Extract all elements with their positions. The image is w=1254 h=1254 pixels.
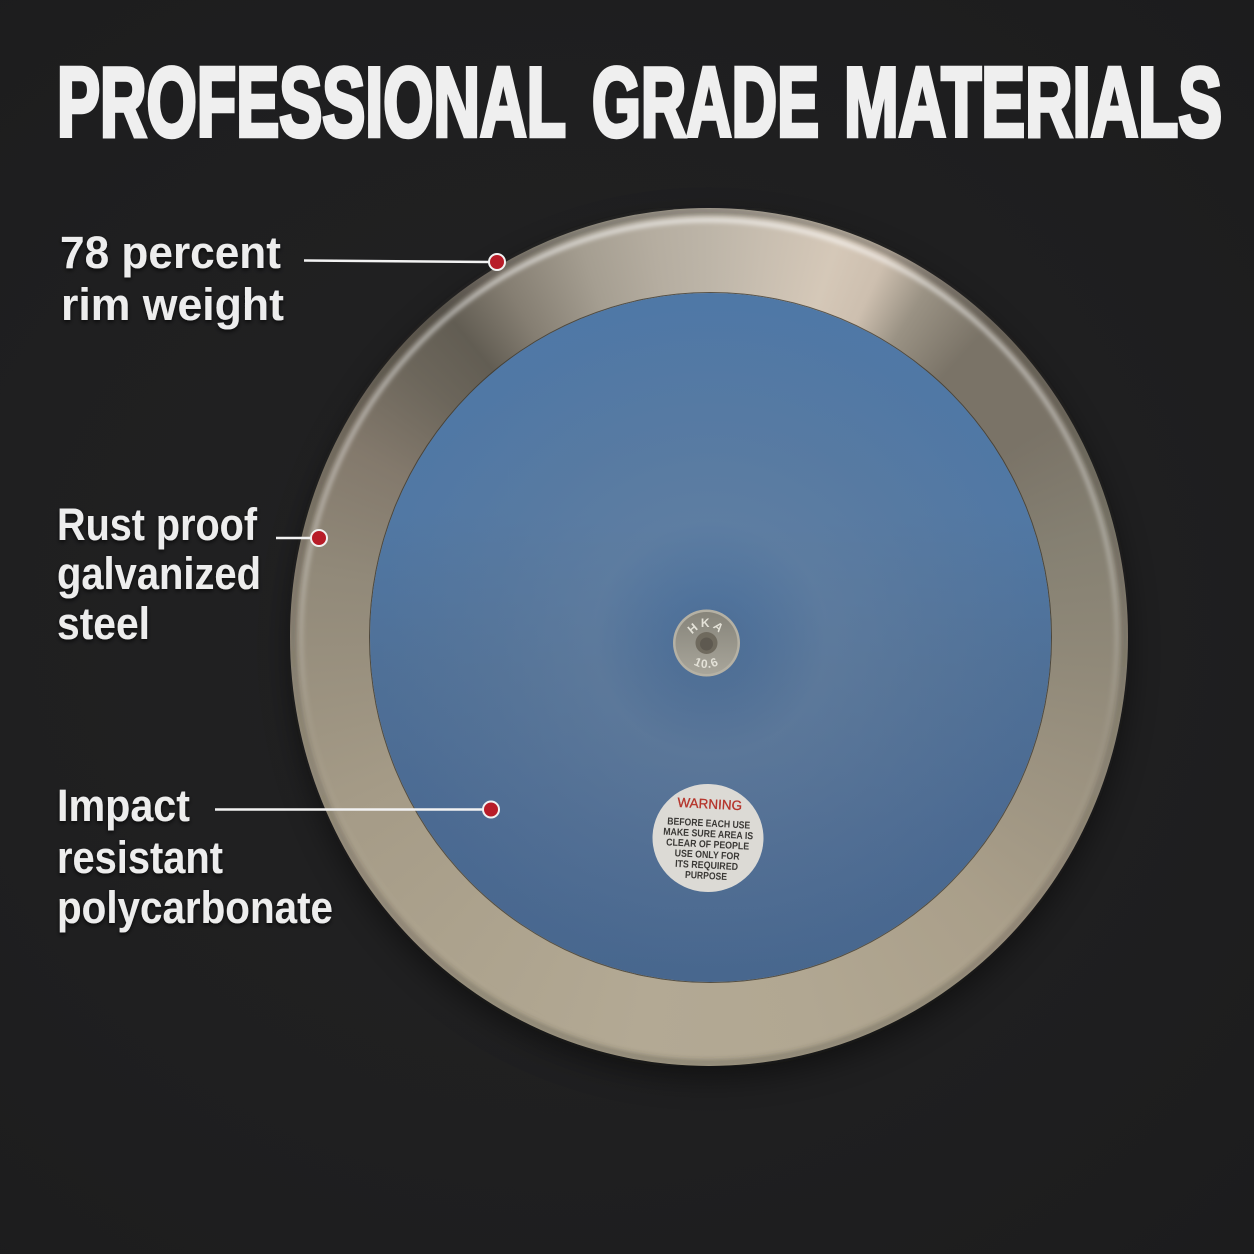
metal rim: [290, 208, 1128, 1066]
warning body: ITS REQUIRED: [675, 859, 738, 873]
label: impact resistant polycarbonate: Impact: [57, 780, 190, 831]
label: impact resistant polycarbonate: polycarbonate: [57, 882, 333, 933]
title: [57, 47, 1222, 157]
warning body: CLEAR OF PEOPLE: [666, 837, 750, 853]
warning body: PURPOSE: [685, 870, 728, 883]
label: impact resistant polycarbonate: resistant: [57, 832, 223, 883]
warning sticker: [650, 781, 766, 895]
hub: [673, 610, 740, 676]
callout: galvanized steel: [57, 499, 327, 649]
pointer: polycarbonate: [215, 802, 499, 818]
label: rust proof galvanized steel: galvanized: [57, 548, 261, 599]
pointer: steel: [276, 530, 327, 546]
label: 78 percent rim weight: rim weight: [61, 279, 284, 330]
label: rust proof galvanized steel: [57, 499, 261, 649]
callout: rim weight: [60, 227, 505, 330]
label: 78 percent rim weight: [60, 227, 284, 330]
label: rust proof galvanized steel: steel: [57, 598, 150, 649]
label: 78 percent rim weight: 78 percent: [60, 227, 281, 278]
blue polycarbonate centre: [370, 293, 1051, 982]
callout: polycarbonate: [57, 780, 499, 933]
warning body: BEFORE EACH USE: [667, 816, 751, 832]
hub text HKA: HKA: [687, 618, 722, 634]
warning body: [661, 816, 754, 884]
warning body: MAKE SURE AREA IS: [663, 827, 754, 842]
warning body: USE ONLY FOR: [674, 848, 741, 863]
label: impact resistant polycarbonate: [57, 780, 333, 933]
rim bevel, hub and warning sticker: [290, 208, 1128, 1066]
title: GRADE: [592, 47, 819, 157]
discus: [290, 208, 1128, 1076]
hub text 10.6: 10.6: [694, 658, 718, 668]
pointer: rim weight: [304, 254, 505, 270]
title: PROFESSIONAL: [57, 47, 566, 157]
warning heading: WARNING: [677, 795, 743, 813]
label: rust proof galvanized steel: Rust proof: [57, 499, 258, 550]
